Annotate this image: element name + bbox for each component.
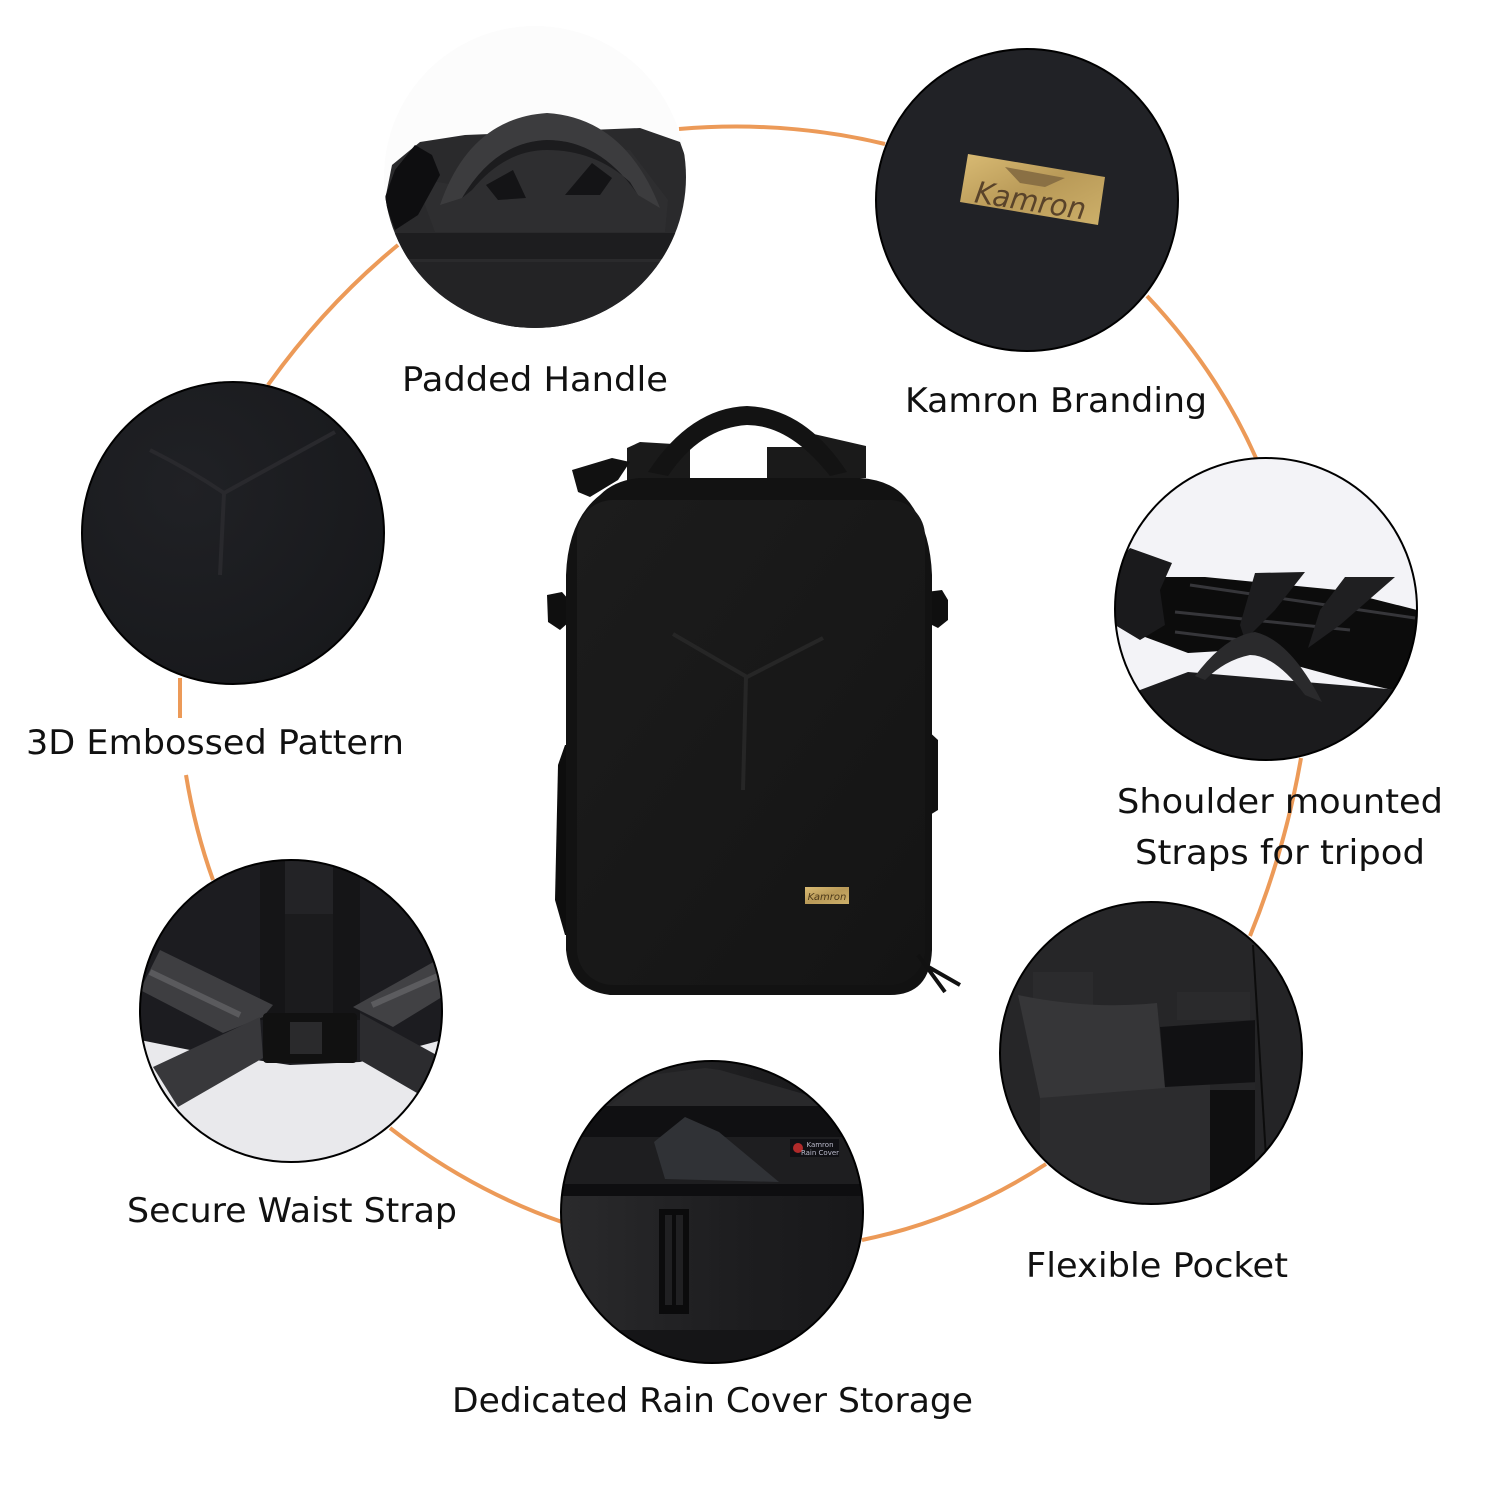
label: shoulder mounted straps line 2: Straps for tripod [1135,833,1425,873]
photo: Kamron branding: Kamron [972,175,1088,228]
label: dedicated rain cover storage: Dedicated Rain Cover Storage [452,1381,973,1421]
photo: Kamron branding [876,49,1178,351]
top handle [648,406,847,476]
circle outline: waist strap [140,860,442,1162]
label: 3D embossed pattern: 3D Embossed Pattern [26,723,404,763]
zip pull [918,955,960,992]
photo: secure waist strap [140,860,442,1162]
main backpack photo: Kamron [808,892,846,903]
connecting ring [180,127,1301,1240]
label: secure waist strap: Secure Waist Strap [127,1191,457,1231]
main backpack photo [547,406,960,995]
photo: padded handle [385,113,686,328]
circle outline: pocket [1000,902,1302,1204]
photo: rain cover storage: Kamron [806,1141,834,1149]
buckle left [572,458,630,497]
brass logo plate [805,887,849,904]
circle outline: tripod [1115,458,1417,760]
side pockets [555,745,585,935]
badge wing logo [1005,167,1065,187]
photo: shoulder mounted straps for tripod [1115,458,1417,770]
top straps [627,432,866,485]
label: padded handle: Padded Handle [402,360,668,400]
brass badge [960,154,1105,225]
main shell [566,478,932,995]
side clips [547,590,948,630]
label: shoulder mounted straps line 1: Shoulder mounted [1117,782,1443,822]
photo: rain cover storage [561,1061,863,1363]
label: Kamron branding: Kamron Branding [905,381,1207,421]
photo: rain cover storage: Rain Cover [801,1149,839,1157]
label: flexible pocket: Flexible Pocket [1026,1246,1288,1286]
photo: flexible pocket [1000,902,1302,1204]
embossed Y [673,634,823,790]
circle outline: rain cover [561,1061,863,1363]
photo: 3D embossed pattern [82,382,384,684]
